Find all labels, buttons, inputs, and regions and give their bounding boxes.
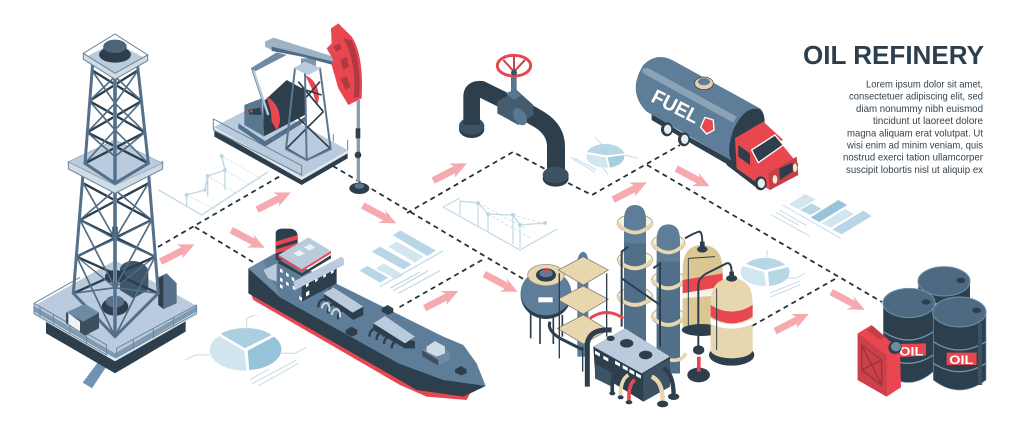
dome — [99, 47, 131, 63]
icon: oil barrels and jerrycan — [858, 267, 986, 397]
pipes — [622, 232, 732, 350]
chart: line chart centre — [443, 198, 557, 250]
chart: line chart left — [158, 154, 268, 215]
middle platform — [68, 162, 163, 193]
deck unit 2 — [373, 323, 415, 348]
title: OIL REFINERY — [803, 40, 984, 70]
chimney — [276, 229, 298, 260]
hull — [248, 268, 486, 397]
pink flow arrows — [157, 156, 868, 337]
front barrel: OIL — [949, 353, 973, 367]
valve body — [497, 90, 533, 125]
sphere tank — [531, 313, 562, 344]
scaffold tower — [577, 252, 588, 357]
icon: oil tanker ship — [248, 229, 486, 400]
wheels — [661, 122, 767, 190]
red weight — [267, 97, 280, 130]
pitman rod — [253, 70, 268, 115]
cab — [735, 122, 798, 190]
chassis — [652, 113, 740, 172]
motor block — [263, 80, 305, 137]
icon: refinery — [521, 205, 754, 407]
chart: bars centre — [359, 231, 443, 293]
platform — [214, 127, 348, 185]
walking beam — [251, 52, 287, 72]
cabin — [66, 304, 99, 336]
horse head — [327, 23, 362, 105]
red handwheel — [497, 55, 531, 76]
top platform — [83, 34, 148, 73]
right flange — [543, 170, 569, 187]
deck — [248, 253, 486, 386]
body text: tincidunt ut laoreet dolore — [873, 116, 983, 127]
body text: Lorem ipsum dolor sit amet, — [866, 80, 983, 90]
jerrycan — [858, 325, 902, 397]
columns — [624, 205, 646, 350]
icon: drilling rig — [34, 34, 197, 388]
body text: consectetuer adipiscing elit, sed — [849, 92, 983, 103]
superstructure — [278, 263, 337, 302]
ramp — [83, 355, 114, 388]
tanks — [683, 245, 723, 330]
red keel — [250, 292, 470, 400]
hatches — [346, 327, 357, 337]
icon: pumpjack — [213, 23, 369, 194]
chart: pie left — [186, 315, 307, 386]
body text: magna aliquam erat volutpat. Ut — [847, 128, 983, 139]
frame — [301, 58, 316, 70]
back barrel — [918, 267, 970, 303]
body text — [843, 80, 984, 176]
dashed connector lines — [158, 145, 882, 326]
red pipe — [590, 312, 623, 318]
column rings back — [617, 214, 685, 326]
chart: pie right — [741, 250, 805, 297]
machinery — [120, 261, 148, 298]
hatch — [695, 77, 713, 90]
lower lattice — [73, 183, 158, 293]
platform base — [46, 318, 186, 373]
body text: suscipit lobortis nisl ut aliquip ex — [846, 165, 984, 176]
forward housing — [422, 343, 450, 366]
tank — [636, 57, 764, 162]
manifold pipes — [587, 330, 612, 387]
chart: pie top — [571, 137, 638, 175]
tank caps — [697, 246, 708, 253]
deck unit 1 — [323, 287, 363, 320]
pole — [357, 100, 360, 182]
manifold — [593, 328, 670, 402]
bottom valve — [687, 368, 710, 382]
body text: diam nonummy nibh euismod — [856, 104, 983, 115]
body text: nostrud exerci tation ullamcorper — [843, 153, 984, 164]
middle barrel: OIL — [899, 344, 923, 358]
left flange — [459, 121, 484, 138]
fuel label: FUEL — [648, 86, 703, 128]
body text: wisi enim ad minim veniam, quis — [846, 140, 983, 152]
pipe — [472, 89, 507, 125]
upper lattice — [85, 70, 148, 163]
icon: pipe and valve — [459, 55, 569, 187]
chart: bars right — [772, 194, 872, 238]
icon: fuel truck — [636, 57, 798, 190]
